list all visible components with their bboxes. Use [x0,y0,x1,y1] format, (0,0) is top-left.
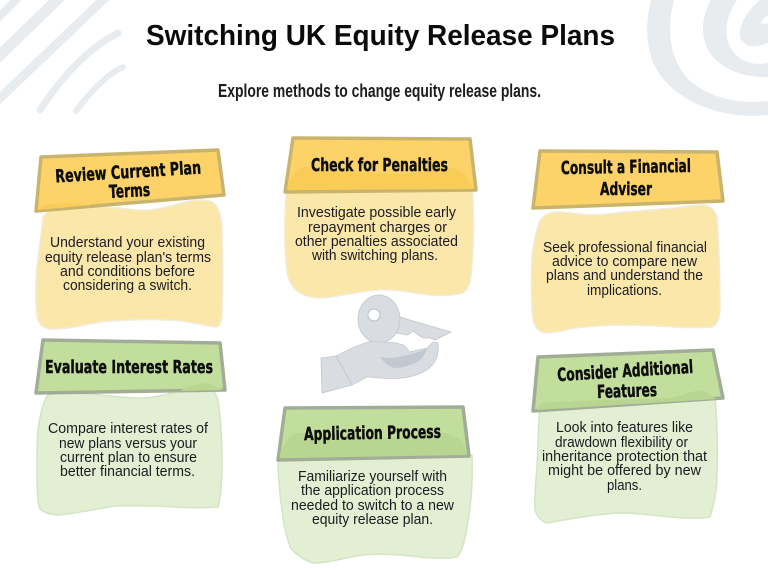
heading: Terms [109,180,151,203]
description: plans. [607,478,642,494]
description: Look into features like [556,420,693,436]
header shading [537,390,716,410]
description: Seek professional financial [543,240,707,256]
panel: check for penalties [285,138,476,298]
decorative brush strokes, top left [0,0,123,111]
illustration: hand holding key [321,295,451,393]
heading: Consider Additional [557,357,694,386]
description: Investigate possible early [297,205,457,221]
heading: Consult a Financial [561,156,691,179]
heading: Adviser [600,179,652,200]
heading [55,158,202,203]
description: better financial terms. [60,464,195,480]
body panel [285,185,474,298]
header banner [533,151,723,208]
heading [561,156,691,200]
description [48,421,209,480]
body panel [36,200,223,329]
heading: Check for Penalties [311,155,448,176]
heading [557,357,694,403]
decorative spiral, top right [647,0,768,116]
description: other penalties associated [295,234,458,250]
description: considering a switch. [63,278,192,294]
header banner [36,340,225,393]
description: might be offered by new [548,463,702,479]
heading: Review Current Plan [55,158,202,187]
body panel [535,395,717,523]
header shading [180,383,223,391]
body panel [531,205,720,333]
title: Switching UK Equity Release Plans [146,20,615,52]
header shading [280,433,467,458]
heading: Features [597,380,657,403]
description: plans and understand the [546,268,703,284]
hand [336,341,438,385]
description [542,420,707,494]
description: Compare interest rates of [48,421,209,437]
header banner [533,350,723,411]
description: drawdown flexibility or [555,435,688,451]
header shading [287,167,473,190]
description: equity release plan. [312,512,433,528]
description: equity release plan's terms [45,250,211,266]
description [295,205,458,264]
body panel [37,385,222,515]
description: repayment charges or [308,220,447,236]
description [291,469,455,528]
description: implications. [587,283,662,299]
description: and conditions before [60,264,195,280]
panel: consult a financial adviser [531,151,723,333]
description: needed to switch to a new [291,498,455,514]
shirt cuff [321,356,352,393]
panel: application process [278,407,472,563]
body panel [278,455,472,563]
header banner [285,138,476,192]
description: the application process [301,483,444,499]
description: Familiarize yourself with [298,469,447,485]
subtitle: Explore methods to change equity release plans. [218,81,541,101]
description [543,240,707,299]
header banner [278,407,469,460]
description: inheritance protection that [542,449,707,465]
description: Understand your existing [50,235,205,251]
description: current plan to ensure [60,450,197,466]
key hole [368,309,380,321]
key [358,295,451,343]
description: new plans versus your [59,436,197,452]
panel: review current plan terms [36,150,224,329]
description: advice to compare new [552,254,698,270]
heading: Application Process [304,422,441,445]
palm shadow [380,348,427,368]
header banner [36,150,224,211]
header shading [38,203,92,210]
description [45,235,211,294]
panel: evaluate interest rates [36,340,225,515]
heading: Evaluate Interest Rates [45,357,213,378]
panel: consider additional features [533,350,723,523]
description: with switching plans. [311,248,438,264]
